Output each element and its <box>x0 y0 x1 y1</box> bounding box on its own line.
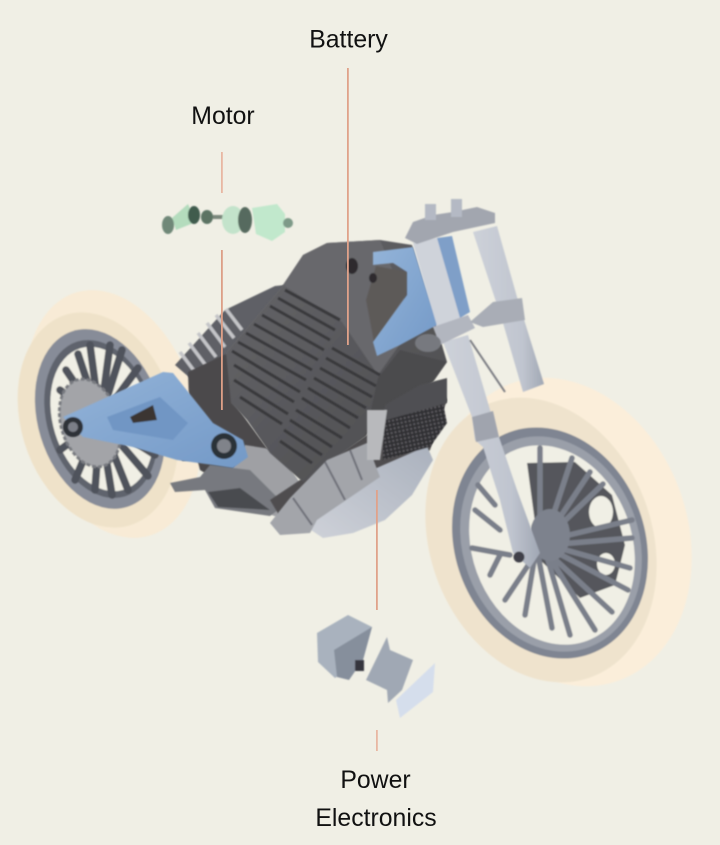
power module housing <box>317 615 372 678</box>
swingarm <box>63 372 248 468</box>
brake cable <box>470 340 505 392</box>
battery bolts <box>346 258 377 283</box>
front wheel <box>387 342 720 722</box>
motor exploded view <box>162 204 293 241</box>
leader line: motor upper <box>221 152 223 193</box>
label: Power Electronics: Power <box>340 767 411 794</box>
right fork tube <box>473 226 544 392</box>
rear rim <box>14 313 186 525</box>
radiator <box>383 403 447 460</box>
rear tire halo <box>0 268 230 560</box>
fork gaiter <box>472 411 499 442</box>
front hub <box>530 509 570 561</box>
rear brake disc <box>49 371 131 475</box>
top triple clamp <box>405 207 495 244</box>
leader line: power electronics lower <box>376 730 378 751</box>
rear axle <box>63 417 83 437</box>
left fork lower tube <box>443 335 540 568</box>
motor right cover <box>252 204 285 241</box>
front tire <box>387 365 695 715</box>
front fork and clamps <box>373 199 544 568</box>
power module boards <box>366 637 413 703</box>
right fork clamp <box>470 298 525 327</box>
fork stems <box>425 204 436 220</box>
front tire halo <box>396 342 720 722</box>
electronics enclosure <box>270 443 380 535</box>
front spokes <box>472 448 632 635</box>
lower casing <box>270 378 447 538</box>
leader line: battery <box>347 68 349 345</box>
rear wheel <box>0 268 230 560</box>
label: Power Electronics <box>315 767 437 832</box>
steering head <box>415 334 441 352</box>
battery top cap <box>283 240 410 375</box>
power module cover plate <box>396 663 435 718</box>
motor rotor <box>188 206 200 224</box>
radiator bracket <box>367 410 387 460</box>
motor left end <box>172 204 196 230</box>
battery pack <box>226 240 447 482</box>
swingarm window <box>130 405 157 423</box>
footpeg and linkage <box>167 435 305 520</box>
rear spokes <box>60 345 155 495</box>
blue headstock bracket <box>373 247 437 356</box>
motor stator <box>222 206 244 234</box>
swingarm recess <box>107 397 188 440</box>
casing backing <box>270 385 447 525</box>
belly pan <box>305 446 433 538</box>
left fork upper tube <box>413 238 460 326</box>
power electronics exploded view <box>317 615 435 718</box>
battery fins <box>232 290 380 463</box>
rear tire <box>0 292 204 548</box>
label: Battery: Battery <box>309 26 388 54</box>
motor housing and rear subframe <box>188 352 295 510</box>
blue fork edge <box>437 236 470 318</box>
lower triple clamp <box>433 315 475 345</box>
leader line: power electronics upper <box>376 490 378 610</box>
label: Power Electronics: Electronics <box>315 805 437 832</box>
dark lower machinery <box>365 350 447 437</box>
shock absorber <box>175 285 285 378</box>
fork axle bolt <box>514 552 524 562</box>
swingarm pivot <box>211 433 237 459</box>
battery body <box>226 240 447 482</box>
front brake disc <box>527 462 625 598</box>
leader line: motor lower <box>221 250 223 410</box>
dark recess behind bracket <box>366 266 407 342</box>
label: Motor: Motor <box>191 103 255 130</box>
front rim <box>420 400 680 686</box>
